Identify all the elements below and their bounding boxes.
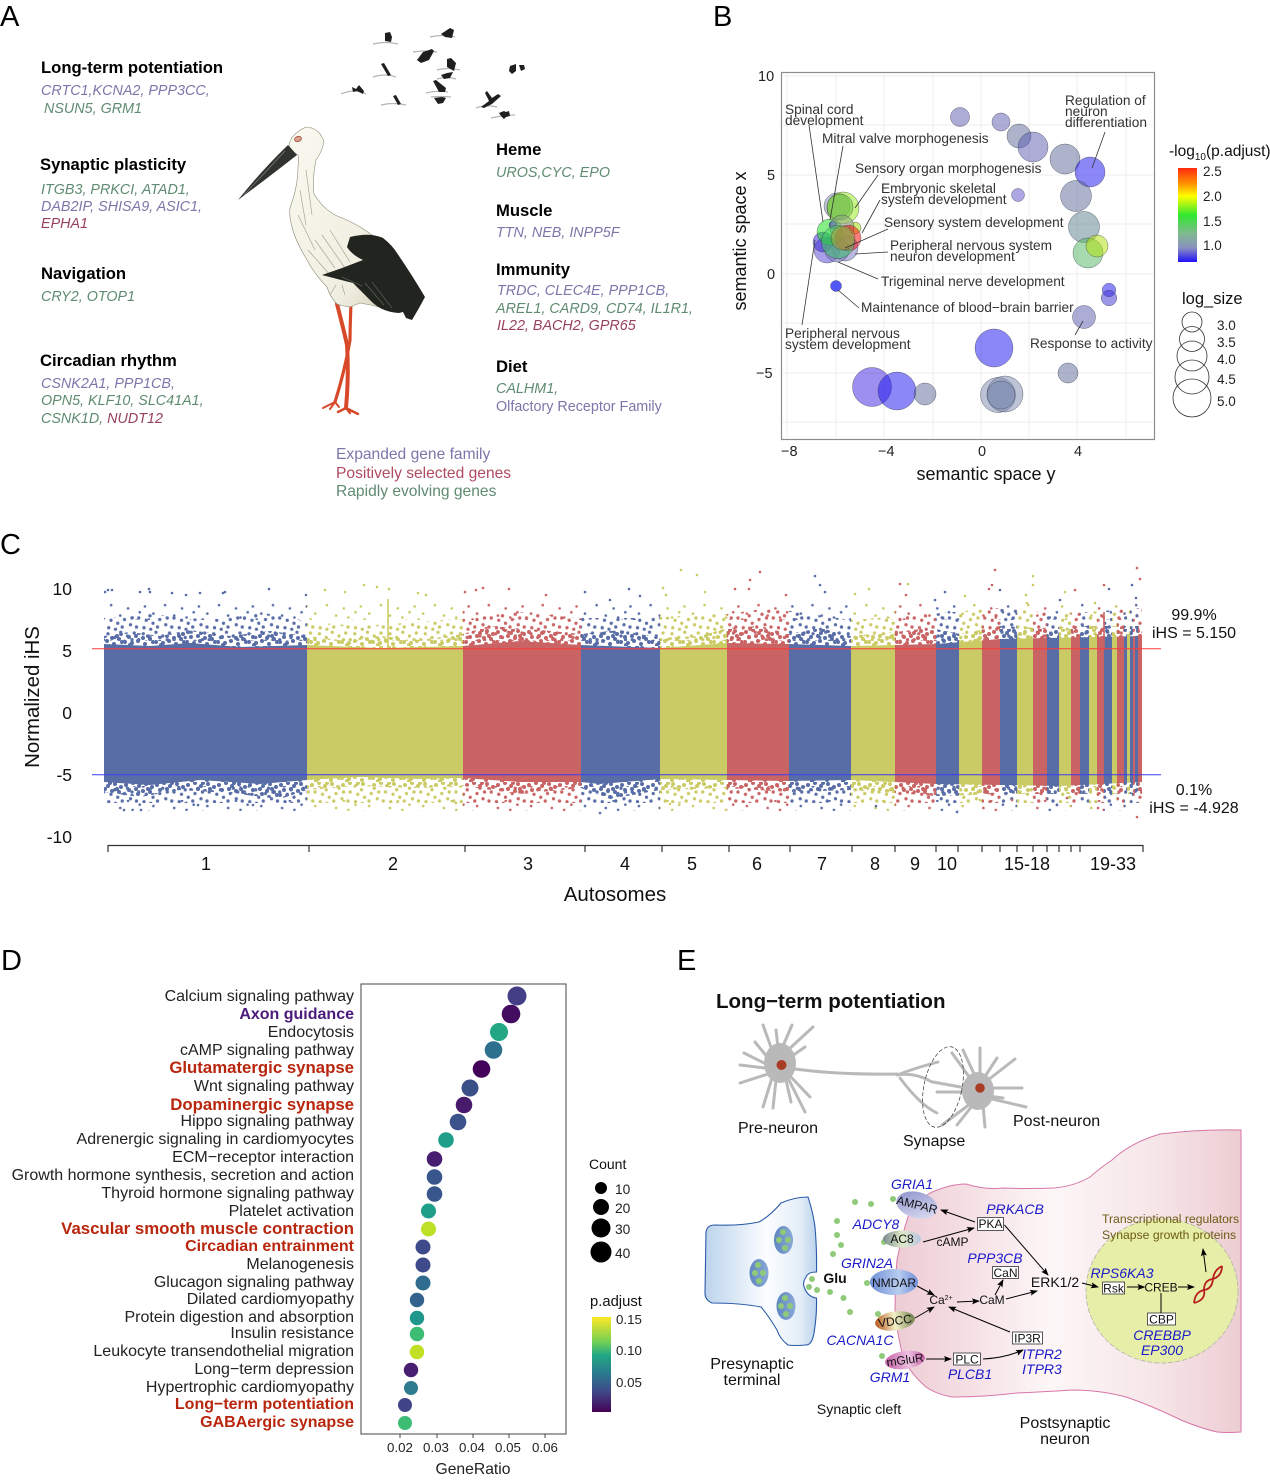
y axis labels — [47, 579, 72, 847]
chromosome labels: 5 — [687, 854, 697, 874]
bubble labels: Regulation of — [1065, 93, 1146, 108]
pathway labels: Thyroid hormone signaling pathway — [101, 1185, 354, 1202]
text block: Diet genes: CALHM1, — [496, 381, 558, 397]
bubble labels: Peripheral nervous system — [890, 238, 1052, 253]
size legend: log_size — [1182, 290, 1243, 308]
legend: gene categories: Positively selected genes — [336, 465, 511, 482]
gene labels: ADCY8 — [852, 1216, 900, 1232]
presynaptic terminal — [705, 1197, 817, 1346]
x axis tick labels — [387, 1440, 558, 1455]
axis tick labels: −8 — [781, 444, 798, 460]
gene labels: GRM1 — [870, 1369, 910, 1385]
neuron labels: Post-neuron — [1013, 1113, 1100, 1130]
pathway labels: Calcium signaling pathway — [165, 988, 354, 1005]
bubble labels: development — [785, 113, 864, 128]
x axis title: GeneRatio — [436, 1461, 511, 1478]
pathway arrows — [915, 1210, 1206, 1359]
text block: Immunity genes: TRDC, CLEC4E, PPP1CB, — [497, 283, 669, 299]
text block: Navigation genes: CRY2, OTOP1 — [41, 289, 135, 305]
pathway boxes — [954, 1217, 1176, 1366]
x axis tick labels: 0.05 — [495, 1440, 521, 1455]
y axis labels: -5 — [56, 765, 72, 785]
legs — [323, 302, 358, 414]
receptors: NMDAR — [872, 1276, 916, 1290]
size legend — [1173, 290, 1243, 417]
p.adjust legend: 0.10 — [616, 1343, 642, 1358]
panel letter E: E — [677, 945, 696, 977]
neuron labels — [738, 1113, 1100, 1150]
gene labels: RPS6KA3 — [1090, 1265, 1154, 1281]
text block: Synaptic plasticity genes: EPHA1 — [41, 216, 88, 232]
neuron labels: Pre-neuron — [738, 1120, 818, 1137]
bubble labels: system development — [785, 337, 911, 352]
receptors: AC8 — [890, 1232, 914, 1246]
text block: Circadian rhythm genes: OPN5, KLF10, SLC41A1, — [41, 393, 204, 409]
pathway labels: ECM−receptor interaction — [172, 1149, 354, 1166]
x axis ticks — [400, 1434, 545, 1438]
cell nuclei — [776, 1060, 786, 1070]
colour legend: 2.5 — [1203, 164, 1222, 179]
size legend: 4.0 — [1217, 352, 1236, 367]
pathway boxes: Rsk — [1103, 1282, 1125, 1296]
panel: gene categories and stork — [40, 28, 693, 500]
gene labels: PLCB1 — [948, 1366, 992, 1382]
pathway boxes: PKA — [978, 1217, 1003, 1231]
text block: Circadian rhythm genes: CSNK1D, NUDT12 — [41, 411, 163, 427]
gene labels: GRIN2A — [841, 1255, 893, 1271]
neuron labels: Synapse — [903, 1133, 965, 1150]
chromosome labels: 4 — [620, 854, 630, 874]
pathway labels: Leukocyte transendothelial migration — [93, 1343, 354, 1360]
text block: Long-term potentiation genes — [41, 58, 223, 117]
pathway labels: Axon guidance — [239, 1006, 354, 1023]
text block: Heme genes: Heme — [496, 140, 541, 159]
y axis labels: -10 — [47, 827, 72, 847]
x axis tick labels: 0.06 — [532, 1440, 558, 1455]
axis tick labels: 5 — [767, 168, 775, 184]
pathway labels: Circadian entrainment — [185, 1238, 355, 1255]
dots — [398, 986, 526, 1430]
transcription outputs text: Transcriptional regulators — [1102, 1212, 1239, 1226]
icon: oriental white stork — [238, 127, 425, 414]
pathway labels: Endocytosis — [268, 1024, 354, 1041]
gene labels — [827, 1176, 1191, 1385]
chromosome labels: 19-33 — [1090, 854, 1136, 874]
panel letter A: A — [0, 1, 20, 33]
y axis title: Normalized iHS — [22, 626, 44, 768]
text block: Synaptic plasticity genes: ITGB3, PRKCI, ATAD1, — [41, 182, 190, 198]
text block: Immunity genes — [495, 260, 693, 334]
text block: Circadian rhythm genes: CSNK2A1, PPP1CB, — [41, 376, 175, 392]
bubble labels: differentiation — [1065, 115, 1147, 130]
chromosome labels: 15-18 — [1004, 854, 1050, 874]
x axis tick labels: 0.02 — [387, 1440, 413, 1455]
plot frame — [361, 984, 566, 1434]
pathway labels: Long−term potentiation — [175, 1396, 354, 1413]
size legend: 4.5 — [1217, 372, 1236, 387]
wing — [322, 235, 425, 320]
postsynaptic neuron shape — [895, 1130, 1241, 1432]
title: Long−term potentiation — [716, 990, 945, 1013]
size legend: 3.5 — [1217, 335, 1236, 350]
pathway labels: Adrenergic signaling in cardiomyocytes — [77, 1131, 354, 1148]
text block: Long-term potentiation genes: CRTC1,KCNA2, PPP3CC, — [41, 83, 210, 99]
text block: Navigation genes: Navigation — [41, 264, 126, 283]
pathway molecule labels: Ca — [929, 1293, 945, 1307]
receptors: VDCC — [877, 1312, 913, 1330]
p.adjust legend: p.adjust — [590, 1294, 642, 1310]
text block: Long-term potentiation genes: NSUN5, GRM1 — [44, 101, 142, 117]
legend: gene categories: Expanded gene family — [336, 446, 491, 463]
manhattan chromosome bands — [104, 580, 1142, 820]
receptors: AMPAR — [895, 1193, 939, 1217]
x axis tick labels: 0.03 — [423, 1440, 449, 1455]
pathway labels: Dilated cardiomyopathy — [187, 1291, 354, 1308]
bubble labels: Maintenance of blood−brain barrier — [861, 300, 1074, 315]
text block: Circadian rhythm genes — [40, 351, 204, 427]
leader lines — [802, 125, 1105, 335]
pathway labels: Platelet activation — [229, 1203, 354, 1220]
receptors — [870, 1187, 941, 1372]
annotation: upper threshold: iHS = 5.150 — [1152, 625, 1236, 642]
icon: pre-neuron and post-neuron — [738, 1025, 1100, 1150]
y axis labels: 10 — [53, 579, 72, 599]
bubble labels: neuron — [1065, 104, 1108, 119]
nucleus — [1086, 1219, 1238, 1363]
colour legend: 2.0 — [1203, 189, 1222, 204]
axis tick labels — [756, 69, 1082, 460]
pathway labels: Glutamatergic synapse — [169, 1058, 354, 1077]
plot frame — [782, 72, 1154, 440]
pathway labels: Melanogenesis — [246, 1256, 354, 1273]
outlier points — [107, 567, 1141, 818]
chromosome labels: 1 — [201, 854, 211, 874]
gene labels: ITPR2 — [1022, 1346, 1062, 1362]
text block: Immunity genes: IL22, BACH2, GPR65 — [497, 318, 637, 334]
text block: Diet genes — [496, 357, 663, 415]
axis tick labels: 10 — [758, 69, 774, 85]
pathway labels: Wnt signaling pathway — [194, 1078, 354, 1095]
legend: gene categories — [336, 446, 511, 500]
feather details — [298, 170, 350, 295]
chromosome labels: 2 — [388, 854, 398, 874]
chromosome labels: 9 — [910, 854, 920, 874]
text block: Synaptic plasticity genes: Synaptic plasticity — [40, 155, 187, 174]
text block: Diet genes: Diet — [496, 357, 528, 376]
axis tick labels: 4 — [1074, 444, 1082, 460]
count legend: 30 — [615, 1222, 631, 1237]
bubble labels: Sensory system development — [884, 215, 1064, 230]
pathway boxes: CBP — [1149, 1312, 1174, 1326]
annotation: lower threshold — [1149, 782, 1239, 817]
threshold line: 0.1% — [92, 774, 1161, 776]
text block: Muscle genes: Muscle — [496, 201, 552, 220]
chromosome labels: 10 — [937, 854, 957, 874]
pathway labels: Growth hormone synthesis, secretion and action — [12, 1167, 354, 1184]
panel: iHS Manhattan plot — [22, 567, 1239, 906]
count legend — [589, 1156, 631, 1262]
transcription outputs text — [1102, 1212, 1239, 1242]
gene labels: ITPR3 — [1022, 1361, 1062, 1377]
transcription outputs text: Synapse growth proteins — [1102, 1228, 1236, 1242]
axis tick labels: −5 — [756, 366, 773, 382]
bubble labels: Response to activity — [1030, 336, 1153, 351]
gene labels: PRKACB — [986, 1201, 1044, 1217]
p.adjust legend — [590, 1294, 642, 1412]
legend: gene categories: Rapidly evolving genes — [336, 483, 497, 500]
bubble labels: Mitral valve morphogenesis — [822, 131, 989, 146]
size legend: 5.0 — [1217, 394, 1236, 409]
text block: Immunity genes: Immunity — [496, 260, 571, 279]
colour legend: 1.5 — [1203, 214, 1222, 229]
pathway molecule labels: 2+ — [945, 1295, 953, 1302]
bubble labels: Spinal cord — [785, 102, 853, 117]
y axis title: semantic space x — [730, 171, 750, 311]
bubble labels: system development — [881, 192, 1007, 207]
bubble labels: Trigeminal nerve development — [881, 274, 1065, 289]
p.adjust legend: 0.05 — [616, 1375, 642, 1390]
receptors: mGluR — [886, 1350, 925, 1370]
bubbles — [813, 108, 1117, 412]
anatomy labels: Presynaptic — [710, 1356, 794, 1373]
chromosome labels: 7 — [817, 854, 827, 874]
chromosome labels: 3 — [523, 854, 533, 874]
colour legend: (p.adjust) — [1206, 143, 1270, 160]
text block: Muscle genes — [496, 201, 621, 241]
gene labels: CREBBP — [1133, 1327, 1191, 1343]
pathway labels: Vascular smooth muscle contraction — [61, 1219, 354, 1238]
anatomy labels: neuron — [1040, 1431, 1090, 1448]
axis tick labels: 0 — [978, 444, 986, 460]
x axis title: semantic space y — [916, 464, 1056, 484]
colour legend — [1169, 143, 1270, 262]
x axis title: Autosomes — [564, 883, 666, 906]
chromosome labels: 8 — [870, 854, 880, 874]
axis tick labels: −4 — [878, 444, 895, 460]
annotation: upper threshold — [1152, 607, 1236, 642]
pathway molecule labels: CaM — [979, 1293, 1005, 1307]
panel letter B: B — [713, 1, 732, 33]
anatomy labels: Synaptic cleft — [817, 1402, 901, 1418]
annotation: lower threshold: 0.1% — [1176, 782, 1212, 799]
panel letter C: C — [0, 529, 21, 561]
pathway labels: Glucagon signaling pathway — [154, 1274, 354, 1291]
colour legend: 1.0 — [1203, 238, 1222, 253]
glutamate dots — [806, 1196, 896, 1359]
text block: Heme genes — [496, 140, 610, 181]
pathway labels — [12, 988, 355, 1431]
anatomy labels — [710, 1356, 1110, 1448]
axis tick labels: 0 — [767, 267, 775, 283]
count legend: Count — [589, 1156, 626, 1172]
chromosome labels: 6 — [752, 854, 762, 874]
chromosome labels — [201, 854, 1136, 874]
pathway labels: Insulin resistance — [230, 1325, 354, 1342]
pathway molecule labels: CREB — [1144, 1280, 1178, 1294]
text block: Long-term potentiation genes: Long-term potentiation — [41, 58, 223, 77]
pathway boxes: CaN — [993, 1266, 1018, 1280]
pathway labels: GABAergic synapse — [200, 1414, 354, 1431]
gene labels: GRIA1 — [891, 1176, 933, 1192]
pathway labels: Long−term depression — [194, 1361, 354, 1378]
pathway molecule labels: cAMP — [936, 1235, 969, 1249]
colour legend: -log — [1169, 143, 1195, 160]
bubble labels: Sensory organ morphogenesis — [855, 161, 1042, 176]
pathway boxes: IP3R — [1014, 1332, 1041, 1346]
gene labels: CACNA1C — [827, 1332, 894, 1348]
y axis labels: 0 — [62, 703, 72, 723]
text block: Synaptic plasticity genes: DAB2IP, SHISA9, ASIC1, — [41, 199, 202, 215]
anatomy labels: Postsynaptic — [1020, 1415, 1110, 1432]
anatomy labels: terminal — [724, 1372, 780, 1389]
pathway labels: Hypertrophic cardiomyopathy — [146, 1379, 354, 1396]
y axis labels: 5 — [62, 641, 72, 661]
gene labels: PPP3CB — [967, 1250, 1023, 1266]
text block: Circadian rhythm genes: Circadian rhythm — [40, 351, 177, 370]
pathway labels: Dopaminergic synapse — [170, 1095, 354, 1114]
threshold line: 99.9% — [92, 648, 1161, 650]
panel letter D: D — [1, 945, 22, 977]
icon: flock of flying storks — [341, 28, 525, 119]
text block: Navigation genes — [41, 264, 135, 305]
panel: semantic space bubble plot — [730, 69, 1270, 484]
panel: KEGG pathway dot plot — [12, 984, 642, 1478]
vesicles — [750, 1226, 796, 1320]
text block: Diet genes: Olfactory Receptor Family — [496, 399, 663, 415]
count legend: 10 — [615, 1182, 631, 1197]
bubble labels: Embryonic skeletal — [881, 181, 996, 196]
eye — [294, 135, 302, 143]
pathway labels: cAMP signaling pathway — [180, 1042, 354, 1059]
colour legend: 10 — [1195, 152, 1206, 163]
pathway boxes: PLC — [955, 1352, 979, 1366]
panel: long-term potentiation pathway — [705, 990, 1241, 1448]
synapse dashed ellipse — [916, 1043, 970, 1131]
pathway molecule labels — [823, 1235, 1178, 1307]
bubble labels — [785, 93, 1153, 352]
count legend: 40 — [615, 1246, 631, 1261]
bubble labels: neuron development — [890, 249, 1015, 264]
icon: DNA helix — [1194, 1266, 1222, 1303]
x axis with chromosome ticks — [108, 845, 1143, 852]
pathway molecule labels: Glu — [823, 1270, 847, 1286]
gene labels: EP300 — [1141, 1342, 1183, 1358]
count legend: 20 — [615, 1201, 631, 1216]
bill — [238, 145, 297, 200]
body — [289, 127, 400, 312]
annotation: upper threshold: 99.9% — [1171, 607, 1217, 624]
pathway labels: Hippo signaling pathway — [181, 1113, 354, 1130]
pathway molecule labels: ERK1/2 — [1031, 1274, 1079, 1290]
bubble labels: Peripheral nervous — [785, 326, 900, 341]
p.adjust legend: 0.15 — [616, 1312, 642, 1327]
pathway labels: Protein digestion and absorption — [124, 1309, 354, 1326]
text block: Heme genes: UROS,CYC, EPO — [496, 165, 610, 181]
text block: Muscle genes: TTN, NEB, INPP5F — [496, 225, 621, 241]
text block: Synaptic plasticity genes — [40, 155, 202, 232]
text block: Immunity genes: AREL1, CARD9, CD74, IL1R1, — [495, 301, 693, 317]
x axis tick labels: 0.04 — [459, 1440, 485, 1455]
annotation: lower threshold: iHS = -4.928 — [1149, 800, 1239, 817]
size legend: 3.0 — [1217, 318, 1236, 333]
